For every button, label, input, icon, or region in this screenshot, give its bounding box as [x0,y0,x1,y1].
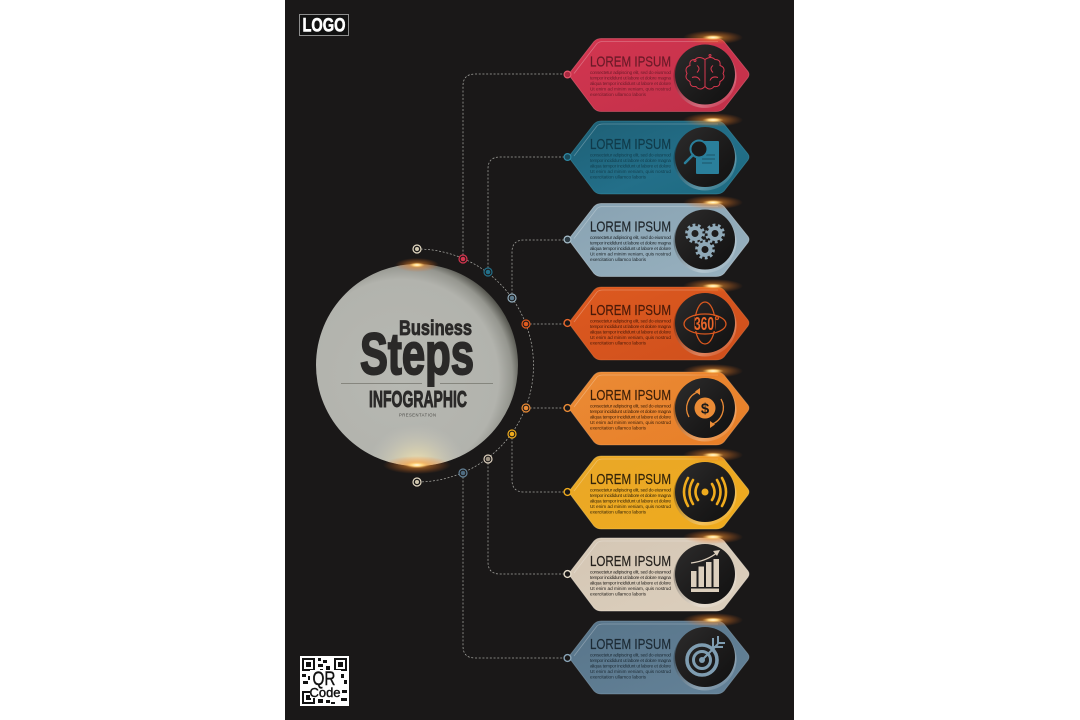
dark poster background [285,0,794,720]
card 7: beige, bar chart: exercitation ullamco laboris [590,592,647,596]
icon: brain [686,54,724,89]
card 3: steel, gears: tempor incididunt ut labore et dolore magna [590,240,671,246]
icon: gears [686,225,724,258]
card 6: yellow, signal [564,448,749,529]
card 6: yellow, signal: LOREM IPSUM [590,471,671,488]
card 8: slate, target: tempor incididunt ut labore et dolore magna [590,658,671,663]
card 6: yellow, signal: aliqua tempor incididunt ut labore et dolore [590,498,671,504]
card 7: beige, bar chart: Ut enim ad minim veniam, quis nostrud [590,586,671,591]
card 1: red, brain: exercitation ullamco laboris [590,92,647,97]
card 4: orange, 360 [564,279,749,360]
central circle title [341,317,493,418]
central circle title: INFOGRAPHIC [369,386,467,412]
card 7: beige, bar chart [564,530,749,611]
icon: dollar coin with arrows: $ [701,400,710,418]
connector nodes on arc [413,245,530,486]
card 2: blue, search document [564,113,749,194]
QR code label: Code [310,686,341,700]
icon: rising bar chart [691,550,720,592]
card 7: beige, bar chart: aliqua tempor incididunt ut labore et dolore [590,580,671,586]
card 5: amber, dollar: exercitation ullamco laboris [590,426,647,430]
card 4: orange, 360: LOREM IPSUM [590,302,671,319]
card 3: steel, gears: consectetur adipiscing elit, sed do eiusmod [590,235,671,240]
icon: target with arrow [687,636,725,675]
card 6: yellow, signal: Ut enim ad minim veniam, quis nostrud [590,504,671,509]
QR code label: QR [312,669,336,690]
card 3: steel, gears: exercitation ullamco laboris [590,257,647,262]
central circle title: Business [399,317,472,340]
icon: dollar coin with arrows [687,388,723,428]
card 1: red, brain: aliqua tempor incididunt ut labore et dolore [590,81,671,86]
connector lines [417,74,567,658]
card 4: orange, 360: Ut enim ad minim veniam, quis nostrud [590,335,671,340]
card 2: blue, search document: Ut enim ad minim veniam, quis nostrud [590,169,671,174]
card 7: beige, bar chart: tempor incididunt ut labore et dolore magna [590,575,671,580]
card 4: orange, 360: consectetur adipiscing elit, sed do eiusmod [590,318,671,324]
logo: LOGO [302,16,346,36]
card 8: slate, target: exercitation ullamco laboris [590,674,647,680]
card 7: beige, bar chart: LOREM IPSUM [590,553,671,570]
card 4: orange, 360: tempor incididunt ut labore et dolore magna [590,324,671,329]
card 6: yellow, signal: exercitation ullamco laboris [590,510,647,514]
card 3: steel, gears: LOREM IPSUM [590,218,671,236]
card 1: red, brain: tempor incididunt ut labore et dolore magna [590,76,671,80]
central circle [316,258,518,474]
card 1: red, brain [564,30,749,112]
card 2: blue, search document: LOREM IPSUM [590,136,671,153]
card 2: blue, search document: aliqua tempor incididunt ut labore et dolore [590,164,671,168]
card 3: steel, gears [564,196,749,276]
card 1: red, brain: consectetur adipiscing elit, sed do eiusmod [590,70,671,75]
icon: magnifier and document [685,140,719,174]
card 4: orange, 360: exercitation ullamco laboris [590,340,647,346]
QR code [300,656,349,706]
card 2: blue, search document: exercitation ullamco laboris [590,174,647,180]
card 5: amber, dollar: LOREM IPSUM [590,387,671,404]
card 8: slate, target: consectetur adipiscing elit, sed do eiusmod [590,652,671,658]
card 5: amber, dollar: tempor incididunt ut labore et dolore magna [590,409,671,414]
QR code label [310,669,341,700]
card 4: orange, 360: aliqua tempor incididunt ut labore et dolore [590,330,671,334]
central circle title: PRESENTATION [399,412,436,418]
card 1: red, brain: LOREM IPSUM [590,54,671,70]
icon: 360 degrees [684,302,726,344]
card 2: blue, search document: consectetur adipiscing elit, sed do eiusmod [590,152,671,158]
card 8: slate, target: Ut enim ad minim veniam, quis nostrud [590,669,671,674]
card 6: yellow, signal: consectetur adipiscing elit, sed do eiusmod [590,488,671,492]
card 8: slate, target [564,613,749,694]
card 8: slate, target: aliqua tempor incididunt ut labore et dolore [590,664,671,668]
card 6: yellow, signal: tempor incididunt ut labore et dolore magna [590,493,671,498]
card 2: blue, search document: tempor incididunt ut labore et dolore magna [590,158,671,163]
card 5: amber, dollar: consectetur adipiscing elit, sed do eiusmod [590,404,671,408]
card 5: amber, dollar: Ut enim ad minim veniam, quis nostrud [590,420,671,425]
card 5: amber, dollar: aliqua tempor incididunt ut labore et dolore [590,414,671,420]
card 5: amber, dollar [564,364,749,445]
card 7: beige, bar chart: consectetur adipiscing elit, sed do eiusmod [590,570,671,574]
card 3: steel, gears: Ut enim ad minim veniam, quis nostrud [590,252,671,256]
card 8: slate, target: LOREM IPSUM [590,636,671,653]
icon: signal waves [684,478,726,506]
card 1: red, brain: Ut enim ad minim veniam, quis nostrud [590,86,671,92]
icon: 360 degrees: 360 [694,314,714,334]
card 3: steel, gears: aliqua tempor incididunt ut labore et dolore [590,246,671,251]
central circle title: Steps [360,322,474,387]
